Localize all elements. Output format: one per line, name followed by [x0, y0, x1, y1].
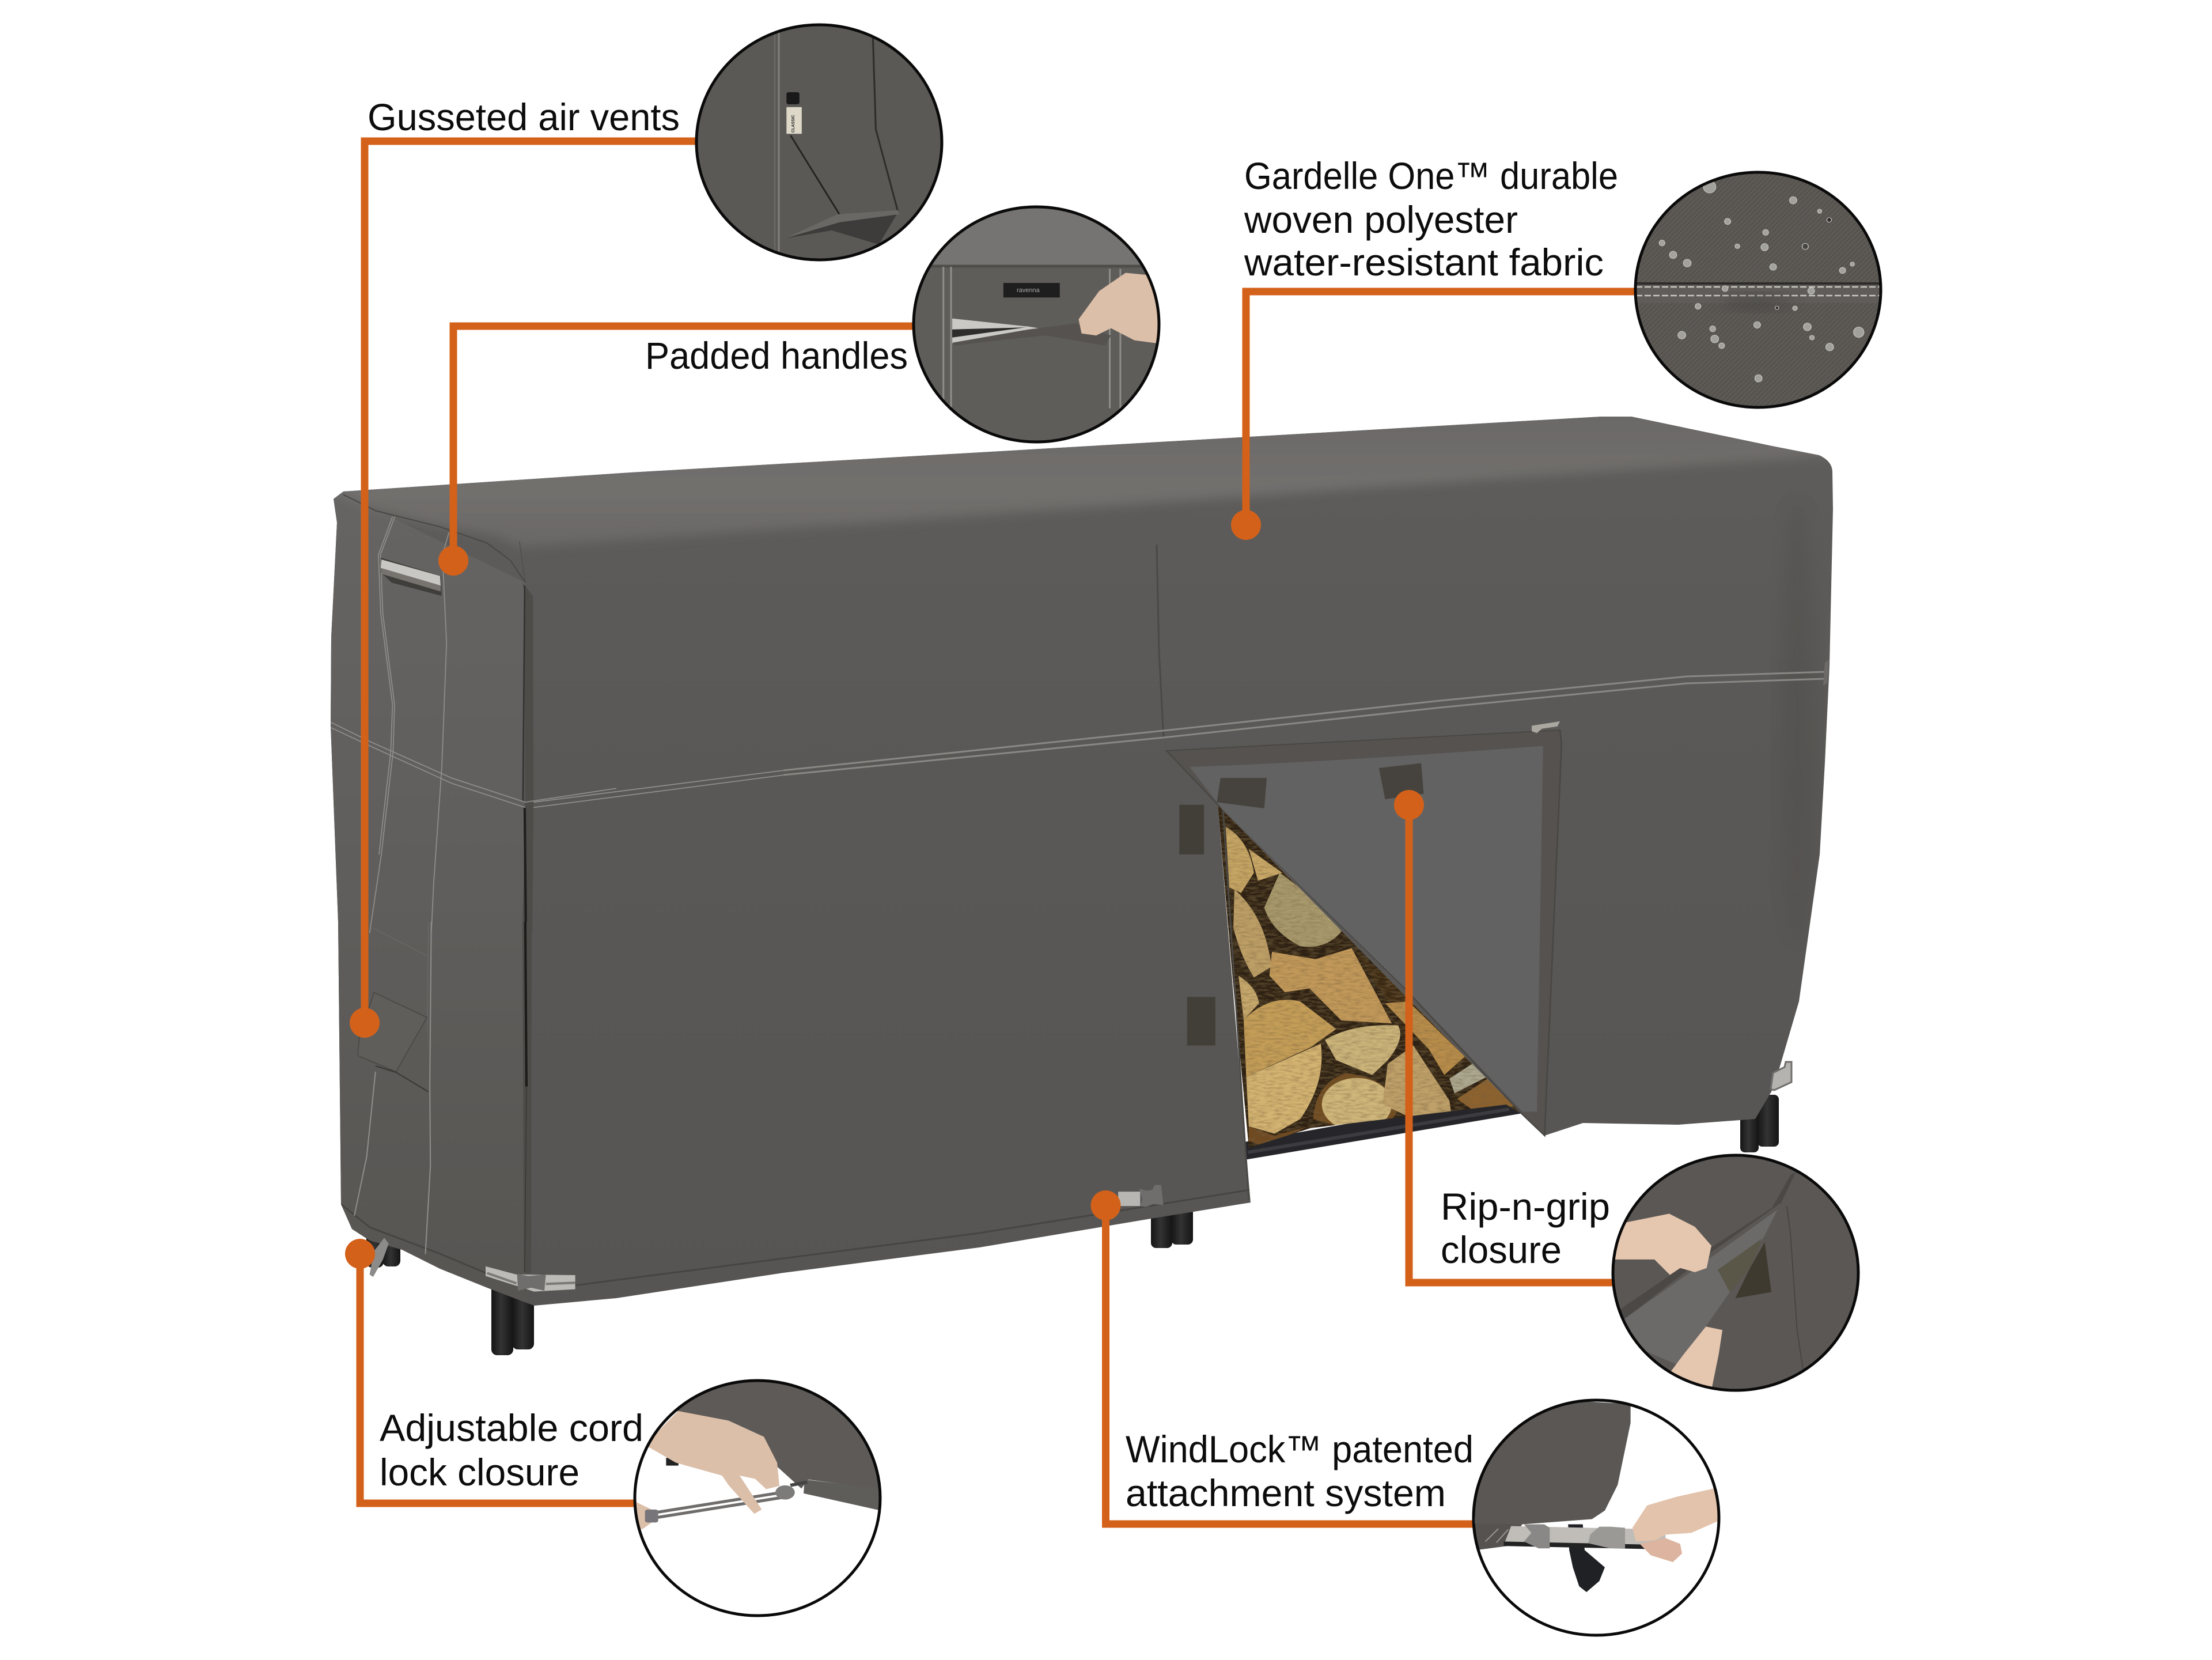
back cord lock	[370, 1238, 389, 1277]
connector line	[1246, 292, 1635, 525]
inset outline	[914, 207, 1159, 442]
label: Gusseted air vents	[368, 96, 680, 138]
right corner seam tab	[1823, 660, 1829, 686]
flap edge line	[1223, 810, 1249, 1200]
callout: rip-n-grip closure	[1394, 790, 1866, 1397]
rack bar front highlight	[1248, 1109, 1509, 1152]
inset: buckle detail	[1475, 1401, 1718, 1593]
side panel details	[331, 494, 783, 933]
label: Padded handles	[645, 334, 908, 377]
marker dot	[345, 1239, 375, 1269]
inset outline	[1635, 172, 1881, 407]
log pieces	[1226, 827, 1514, 1147]
marker dot	[1394, 790, 1424, 820]
label	[1244, 154, 1618, 283]
vent and lower side details	[354, 922, 575, 1292]
callout: durable fabric	[1231, 154, 1889, 540]
inset outline	[1613, 1155, 1858, 1390]
inset: handle detail	[915, 209, 1158, 440]
firewood stack	[1218, 806, 1520, 1148]
cover silhouette	[331, 417, 1833, 1306]
velcro patch on cover upper	[1179, 805, 1204, 854]
label: Gardelle One™ durable	[1244, 154, 1618, 197]
brand tag text: CLASSIC	[791, 115, 796, 133]
label: Rip-n-grip	[1441, 1185, 1610, 1228]
stitch lines	[331, 516, 783, 933]
corner strap	[486, 1266, 575, 1292]
label: woven polyester	[1244, 198, 1518, 241]
connector line	[360, 1254, 635, 1503]
velcro patch on cover lower	[1187, 997, 1215, 1046]
cover shading and faces	[323, 403, 1838, 1314]
marker dot	[350, 1008, 380, 1038]
zipper pull	[1532, 721, 1560, 733]
center strap buckle	[1118, 1185, 1164, 1207]
door stitch seam	[783, 672, 1825, 775]
connector line	[1409, 805, 1613, 1283]
connector line	[365, 141, 696, 1023]
inset: hook and loop detail	[1614, 1157, 1857, 1389]
marker dot	[438, 546, 468, 576]
folded door flap	[1166, 721, 1562, 1200]
label: closure	[1441, 1228, 1562, 1271]
velcro patch on flap 2	[1379, 763, 1424, 799]
callout: windlock attachment	[1091, 1190, 1722, 1642]
flap hem	[1166, 730, 1562, 1136]
inset: water droplets on fabric	[1637, 174, 1879, 406]
inset: vent detail	[698, 27, 940, 258]
label	[1126, 1428, 1474, 1514]
callout: gusseted air vents	[350, 17, 950, 1038]
inset outline	[635, 1381, 880, 1616]
connector line	[453, 326, 913, 561]
velcro patch on flap	[1217, 778, 1267, 808]
right strap buckle	[1771, 1062, 1791, 1090]
connector line	[1106, 1205, 1474, 1524]
callout: padded handles	[438, 202, 1170, 576]
label	[380, 1406, 643, 1493]
vertical panel seam	[1157, 544, 1164, 739]
rack base bar	[1244, 1092, 1527, 1160]
padded handle	[381, 558, 442, 596]
flap inner lining	[1190, 746, 1543, 1111]
label: water-resistant fabric	[1244, 241, 1604, 283]
label: attachment system	[1126, 1472, 1446, 1514]
brand label text: ravenna	[1017, 287, 1040, 294]
corner seam strip	[522, 922, 532, 1273]
label: Adjustable cord	[380, 1406, 643, 1449]
marker dot	[1231, 510, 1261, 540]
inset outline	[696, 25, 942, 260]
rack legs	[366, 1095, 1779, 1355]
bottom hem line	[534, 1190, 1250, 1291]
log rack cover	[323, 403, 1838, 1314]
label	[1441, 1185, 1610, 1271]
inset outline	[1474, 1400, 1719, 1635]
label: WindLock™ patented	[1126, 1428, 1474, 1470]
gusset vent	[358, 1018, 429, 1092]
inset: cord lock detail	[636, 1382, 879, 1529]
marker dot	[1091, 1190, 1121, 1220]
callout: cord lock closure	[345, 1239, 887, 1619]
label: lock closure	[380, 1451, 579, 1493]
